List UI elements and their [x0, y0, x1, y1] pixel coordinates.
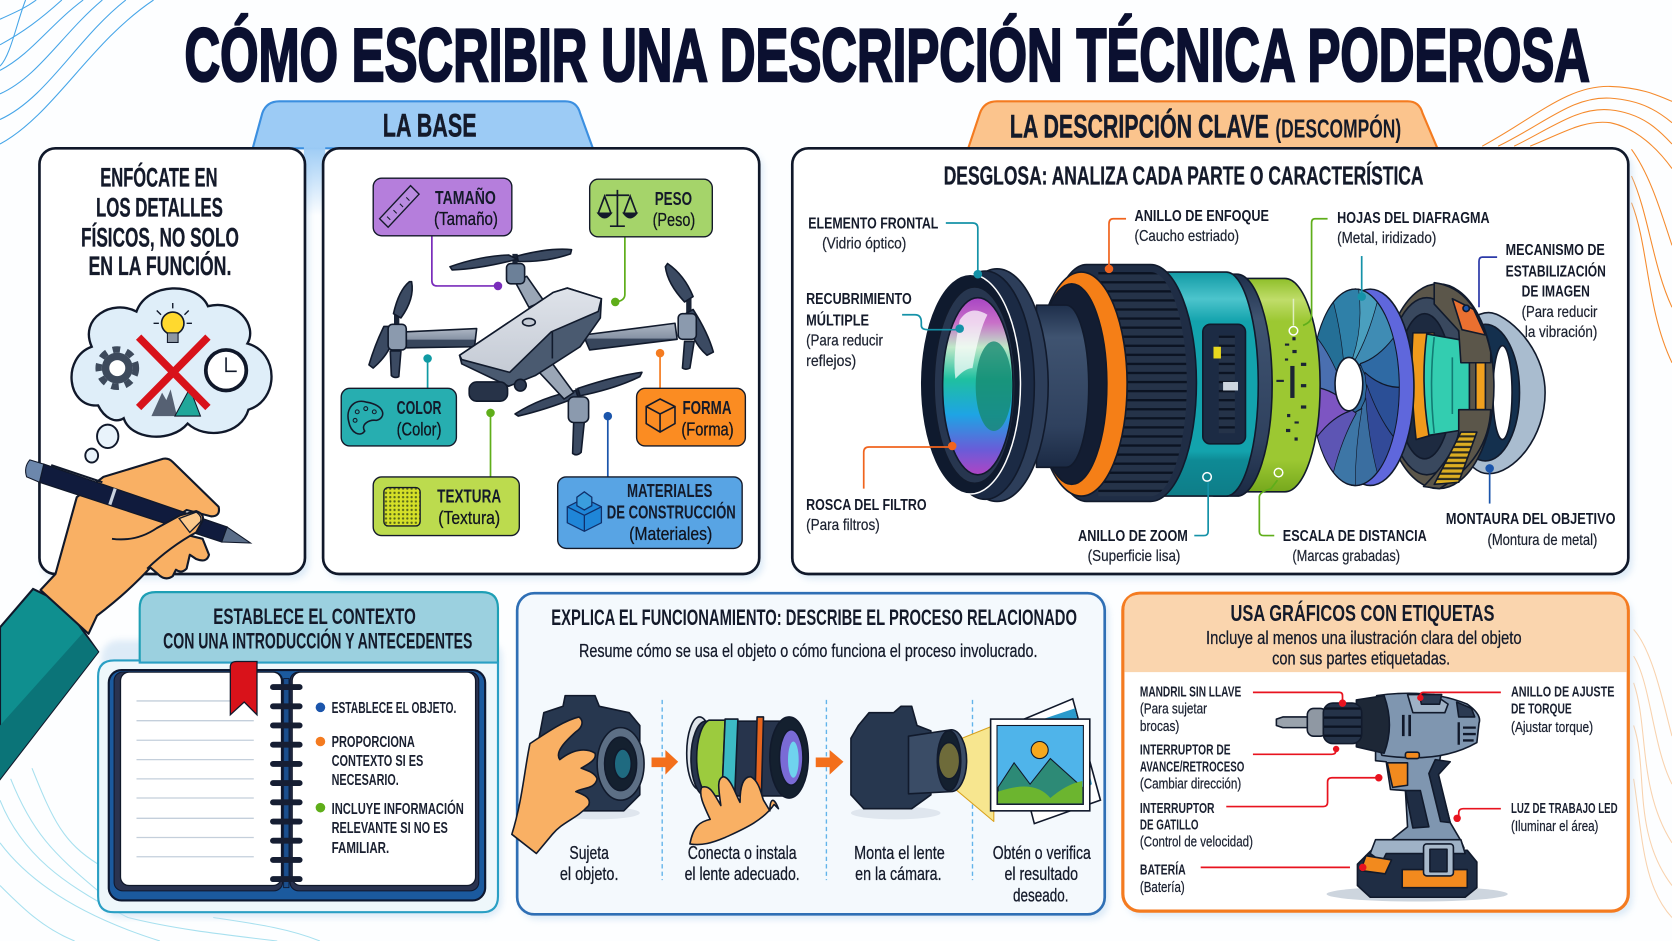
bookmark: [230, 661, 257, 715]
bullet: proporciona contexto: CONTEXTO SI ES: [332, 753, 423, 770]
icon: thought cloud: [72, 288, 272, 462]
battery: [1357, 840, 1477, 897]
subheading: resume: Resume cómo se usa el objeto o cómo funciona el proceso involucrado.: [579, 641, 1038, 661]
label: rosca del filtro: ROSCA DEL FILTRO: [806, 497, 927, 514]
thumb: [112, 511, 203, 569]
focus ring dark band: [1044, 265, 1196, 501]
label: luz de trabajo: (Iluminar el área): [1511, 819, 1598, 835]
sleeve: [0, 589, 98, 779]
heading: enfócate: [81, 163, 239, 281]
callout: materiales: MATERIALES: [627, 481, 712, 501]
lens barrel: [909, 730, 967, 794]
panel: establece el contexto: [98, 592, 498, 912]
caption 3: en la cámara.: [855, 864, 942, 884]
handle: [1376, 751, 1464, 848]
spiral binding: [273, 679, 300, 888]
label: anillo de ajuste: DE TORQUE: [1511, 702, 1572, 718]
label: rosca del filtro: (Para filtros): [806, 517, 880, 534]
caption 4: Obtén o verifica: [993, 843, 1092, 863]
label: interruptor de gatillo: [1140, 774, 1382, 851]
caption 4: [993, 843, 1092, 906]
background waves top right: [1482, 86, 1672, 363]
label: rosca del filtro: [806, 442, 956, 534]
panel: la descripción clave, lens: [792, 148, 1628, 574]
bullet: incluye información: [316, 800, 464, 857]
stabilizer: [1383, 283, 1494, 489]
header band: [140, 592, 498, 663]
tab: la descripción clave: LA DESCRIPCIÓN CLAVE: [1010, 109, 1269, 145]
label: anillo de enfoque: [1105, 208, 1269, 273]
icon: gear: [99, 349, 136, 387]
caption 4: deseado.: [1013, 886, 1068, 906]
connector: peso: [611, 237, 625, 306]
bullet: establece el objeto: ESTABLECE EL OBJETO.: [332, 700, 456, 717]
switch: [1405, 752, 1419, 759]
callout: color: (Color): [397, 419, 441, 439]
callout: forma: FORMA: [682, 398, 732, 418]
label: elemento frontal: (Vidrio óptico): [822, 236, 906, 253]
label: mecanismo de estabilización: [1479, 242, 1606, 341]
label: elemento frontal: ELEMENTO FRONTAL: [808, 215, 939, 232]
orange ring: [1035, 272, 1127, 496]
label: recubrimiento múltiple: (Para reducir: [806, 333, 883, 350]
hand: [41, 459, 219, 634]
callout: color: [341, 388, 456, 446]
connector: tamaño: [432, 236, 502, 290]
icon: palette: [348, 401, 383, 434]
panel: usa gráficos con etiquetas: USA GRÁFICOS CON ETIQUETAS: [1231, 599, 1494, 626]
icon: clock: [206, 350, 246, 390]
label: batería: (Batería): [1140, 880, 1185, 896]
bit: [1276, 717, 1314, 728]
icon: blocks: [567, 492, 601, 531]
label: anillo de enfoque: ANILLO DE ENFOQUE: [1135, 208, 1269, 225]
label: montura del objetivo: MONTAURA DEL OBJETIVO: [1446, 511, 1615, 528]
label: hojas del diafragma: HOJAS DEL DIAFRAGMA: [1337, 210, 1490, 227]
label: mecanismo de estabilización: (Para reducir: [1522, 304, 1597, 321]
callout: materiales: DE CONSTRUCCIÓN: [607, 502, 736, 523]
arrow 2: [816, 750, 843, 775]
callout: peso: [590, 179, 712, 237]
icon: cube: [646, 399, 675, 432]
caption 2: el lente adecuado.: [685, 864, 800, 884]
bullet: establece el objeto: [316, 700, 456, 717]
heading: enfócate: FÍSICOS, NO SOLO: [81, 222, 239, 252]
heading: explica: EXPLICA EL FUNCIONAMIENTO: DESCRIBE EL PROCESO RELACIONADO: [551, 605, 1077, 630]
panel: enfócate: [39, 148, 305, 574]
callout: materiales: [558, 477, 742, 548]
connector: forma: [656, 349, 664, 388]
label: anillo de ajuste: (Ajustar torque): [1511, 720, 1593, 736]
header band: [1124, 595, 1627, 672]
label: luz de trabajo: [1453, 801, 1618, 835]
panel: usa gráficos con etiquetas: con sus partes etiquetadas.: [1272, 649, 1450, 669]
meadow: [998, 781, 1082, 803]
icon: ruler: [380, 186, 419, 227]
bullet: incluye información: RELEVANTE SI NO ES: [332, 820, 448, 837]
body: [1374, 693, 1480, 758]
label: mecanismo de estabilización: DE IMAGEN: [1522, 284, 1590, 301]
callout: tamaño: [373, 178, 512, 236]
label: interruptor de avance: (Cambiar dirección): [1140, 776, 1241, 792]
caption 2: Conecta o instala: [688, 843, 797, 863]
label: montura del objetivo: (Montura de metal): [1488, 532, 1597, 549]
notebook: [109, 661, 485, 900]
callout: textura: (Textura): [438, 508, 500, 528]
dark band behind scale: [1180, 274, 1272, 496]
label: interruptor de avance: [1140, 742, 1339, 792]
callout: materiales: (Materiales): [629, 524, 712, 544]
heading: enfócate: LOS DETALLES: [96, 193, 223, 223]
icon: red cross: [139, 337, 208, 408]
tab: la descripción clave: [968, 101, 1437, 148]
label: interruptor de gatillo: INTERRUPTOR: [1140, 801, 1215, 817]
bullet: incluye información: FAMILIAR.: [332, 840, 389, 857]
label: escala de distancia: [1259, 468, 1427, 565]
arrow 1: [652, 750, 678, 775]
hand: [690, 777, 778, 845]
label: anillo de enfoque: (Caucho estriado): [1135, 228, 1239, 245]
front ring: [920, 269, 1048, 501]
background waves bottom right: [1634, 629, 1672, 918]
zoom ring: [1128, 272, 1258, 496]
heading: enfócate: EN LA FUNCIÓN.: [89, 251, 231, 281]
heading: desglosa: DESGLOSA: ANALIZA CADA PARTE O CARACTERÍSTICA: [944, 162, 1424, 191]
step 2: lens in hand: [687, 717, 808, 845]
label: recubrimiento múltiple: RECUBRIMIENTO: [806, 291, 912, 308]
iris diaphragm: [1305, 275, 1414, 500]
sun: [1031, 741, 1048, 759]
panel: la base, drone: [323, 148, 759, 574]
heading: enfócate: ENFÓCATE EN: [100, 163, 218, 193]
caption 1: [560, 843, 618, 884]
callout: color: COLOR: [397, 398, 441, 418]
step 4: photographs: [991, 699, 1100, 824]
label: mandril sin llave: (Para sujetar: [1140, 702, 1207, 718]
label: recubrimiento múltiple: MÚLTIPLE: [806, 310, 869, 329]
label: anillo de ajuste: [1417, 685, 1615, 736]
distance scale ring: [1208, 278, 1320, 492]
caption 1: el objeto.: [560, 864, 618, 884]
illustration: drone: [369, 249, 713, 455]
callout: textura: [373, 477, 519, 536]
lens: [687, 717, 808, 798]
hand: [512, 717, 597, 854]
callout: tamaño: TAMAÑO: [435, 187, 496, 208]
label: interruptor de gatillo: (Control de velocidad): [1140, 835, 1253, 851]
barrel neck: [1036, 305, 1089, 467]
label: recubrimiento múltiple: reflejos): [806, 353, 856, 370]
label: hojas del diafragma: (Metal, iridizado): [1337, 230, 1436, 247]
callout: forma: [637, 388, 745, 446]
label: anillo de zoom: ANILLO DE ZOOM: [1078, 528, 1188, 545]
label: anillo de zoom: (Superficie lisa): [1088, 548, 1180, 565]
chuck and collar: [1356, 696, 1389, 753]
tab: la base: LA BASE: [383, 108, 477, 144]
caption 4: el resultado: [1004, 864, 1078, 884]
panel: establece el contexto: ESTABLECE EL CONTEXTO: [213, 604, 416, 629]
label: mecanismo de estabilización: la vibración): [1525, 324, 1597, 341]
light beam: [940, 725, 994, 822]
bullet: incluye información: INCLUYE INFORMACIÓN: [332, 800, 464, 818]
ribbed focus ring: [1098, 272, 1187, 496]
label: mecanismo de estabilización: MECANISMO DE: [1506, 242, 1605, 259]
callout: peso: PESO: [655, 189, 692, 209]
illustration: exploded lens: [920, 265, 1545, 501]
icon: light bulb: [154, 303, 192, 342]
panel: explica el funcionamiento: [512, 593, 1105, 914]
icon: mountains: [151, 388, 200, 416]
connector: color: [423, 354, 432, 388]
pen: [26, 460, 251, 543]
background waves bottom left: [0, 768, 320, 941]
bullet: proporciona contexto: [316, 734, 423, 789]
icon: scales: [598, 190, 637, 226]
caption 3: [854, 843, 945, 884]
step 3: camera with light beam: [851, 706, 994, 822]
illustration: cordless drill: [1276, 693, 1508, 902]
label: batería: [1140, 861, 1366, 896]
panel: usa gráficos con etiquetas: [1123, 593, 1628, 911]
glass element: [943, 298, 1013, 475]
label: escala de distancia: ESCALA DE DISTANCIA: [1283, 528, 1427, 545]
panel body: [98, 660, 498, 912]
callout: textura: TEXTURA: [437, 487, 501, 507]
label: batería: BATERÍA: [1140, 861, 1186, 878]
label: hojas del diafragma: [1289, 210, 1490, 335]
zoom window: [1203, 324, 1245, 444]
label: interruptor de avance: INTERRUPTOR DE: [1140, 742, 1231, 758]
label: mandril sin llave: brocas): [1140, 719, 1179, 735]
label: escala de distancia: (Marcas grabadas): [1292, 548, 1400, 565]
label: mandril sin llave: [1140, 685, 1346, 735]
caption 3: Monta el lente: [854, 843, 945, 863]
callout: peso: (Peso): [653, 210, 695, 230]
label: luz de trabajo: LUZ DE TRABAJO LED: [1511, 801, 1618, 817]
callout: tamaño: (Tamaño): [434, 209, 498, 229]
camera body: [535, 696, 644, 819]
background waves top left: [0, 0, 154, 144]
connector: textura: [486, 409, 495, 477]
lens mount: [1450, 313, 1545, 474]
shadow: [1327, 887, 1508, 902]
shadow: [851, 807, 940, 819]
label: anillo de zoom: [1078, 473, 1211, 565]
camera body: [851, 706, 931, 809]
mountains: [998, 759, 1082, 803]
label: interruptor de gatillo: DE GATILLO: [1140, 818, 1199, 834]
panel: establece el contexto: CON UNA INTRODUCCIÓN Y ANTECEDENTES: [163, 629, 472, 654]
label: interruptor de avance: AVANCE/RETROCESO: [1140, 759, 1244, 775]
tab: la base: [253, 101, 593, 216]
label: mecanismo de estabilización: ESTABILIZACIÓN: [1506, 261, 1606, 280]
illustration: writing hand: [0, 459, 251, 779]
bullet: proporciona contexto: NECESARIO.: [332, 772, 399, 789]
bullet: proporciona contexto: PROPORCIONA: [332, 734, 415, 751]
callout: forma: (Forma): [681, 419, 734, 439]
connector: materiales: [604, 412, 612, 477]
ruled lines: [136, 701, 254, 857]
caption 1: Sujeta: [569, 843, 610, 863]
tab: la descripción clave: (DESCOMPÓN): [1275, 114, 1401, 144]
label: anillo de ajuste: ANILLO DE AJUSTE: [1511, 685, 1615, 701]
step 1: camera in hand: [512, 696, 644, 854]
label: elemento frontal: [808, 215, 982, 278]
icon: texture swatch: [384, 488, 420, 526]
label: recubrimiento múltiple: [806, 291, 964, 370]
label: montura del objetivo: [1446, 464, 1615, 549]
label: mandril sin llave: MANDRIL SIN LLAVE: [1140, 685, 1241, 701]
panel: usa gráficos con etiquetas: Incluye al menos una ilustración clara del objeto: [1206, 628, 1522, 648]
caption 2: [685, 843, 800, 884]
trigger: [1387, 763, 1408, 787]
